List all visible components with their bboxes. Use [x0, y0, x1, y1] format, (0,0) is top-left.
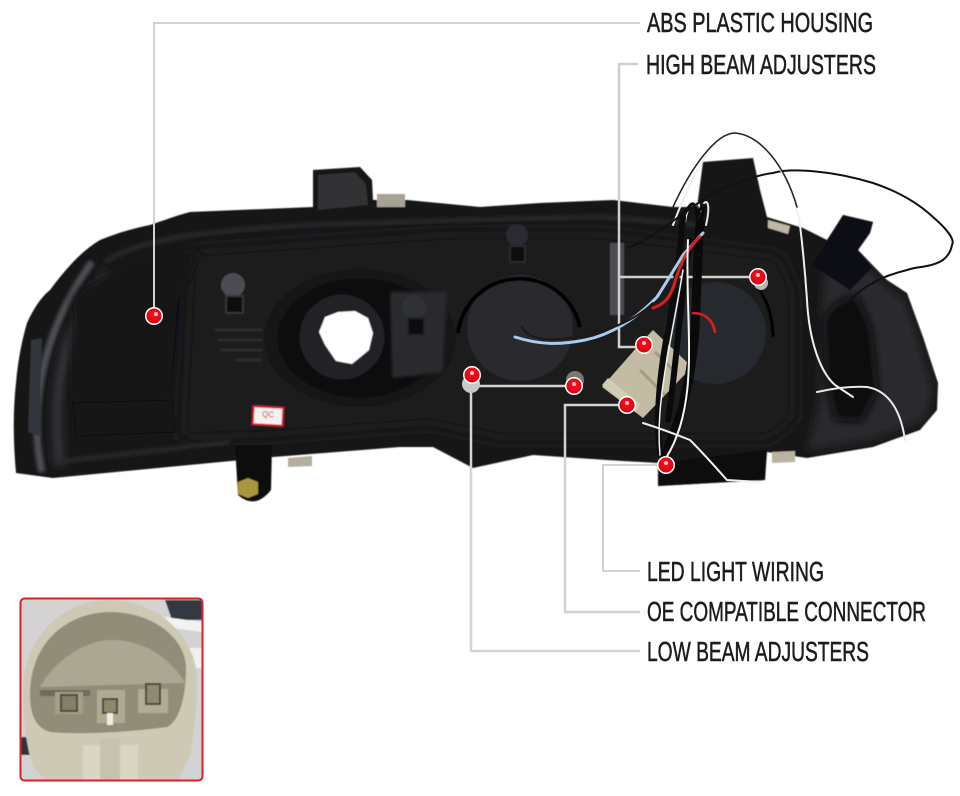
left recessed panel	[72, 252, 200, 402]
label: LED light wiring: LED LIGHT WIRING	[647, 556, 824, 587]
white wire loop	[673, 133, 853, 397]
grey wire beside blue	[522, 303, 653, 340]
lower white wires	[643, 423, 760, 482]
marker: low beam left	[463, 366, 481, 384]
headlight housing	[14, 158, 938, 501]
top left clip	[377, 194, 405, 207]
grey panel beside socket	[390, 292, 447, 378]
QC sticker: QC	[262, 410, 275, 419]
low beam dome	[467, 275, 573, 381]
black loop wire	[707, 170, 953, 300]
harness top tangle	[685, 202, 708, 225]
cavity half dome	[40, 640, 185, 687]
latch	[83, 745, 138, 780]
bottom clips	[288, 456, 312, 467]
leader: OE compatible connector	[565, 405, 640, 612]
label: ABS plastic housing: ABS PLASTIC HOUSING	[647, 7, 873, 38]
central panel	[180, 232, 795, 440]
wiring harness	[515, 133, 953, 482]
adjuster screw: low beam right	[566, 371, 584, 389]
bulb socket recess	[260, 266, 460, 410]
bottom mounting bolt	[235, 445, 272, 501]
low beam arc	[458, 279, 580, 333]
leader: high beam adjusters	[619, 64, 758, 347]
inset red border	[20, 598, 202, 780]
terminal left	[40, 690, 90, 714]
bottom tab	[658, 450, 766, 486]
red wire short	[693, 313, 715, 332]
marker: low beam right	[565, 377, 583, 395]
socket hole	[319, 311, 373, 364]
white bundle wires	[666, 240, 689, 458]
high beam arc	[757, 287, 773, 337]
blue wire	[515, 233, 703, 343]
right lens	[808, 250, 933, 450]
adjuster screw: high beam	[754, 276, 768, 290]
marker: LED wiring	[657, 456, 675, 474]
inner lens band	[57, 272, 108, 465]
top right clip	[768, 220, 790, 234]
top right bracket	[812, 215, 873, 290]
inset background	[21, 599, 202, 780]
top light rim	[105, 217, 700, 262]
socket ring	[298, 293, 386, 381]
outer lens band	[37, 262, 92, 472]
left vent	[28, 338, 42, 436]
high beam bracket reflection	[610, 243, 624, 315]
small grey plug middle	[402, 295, 426, 335]
high beam dome	[664, 282, 766, 384]
black thin loop	[673, 133, 797, 207]
small grey plug top	[506, 224, 528, 262]
QC sticker	[253, 406, 283, 426]
marker: connector bottom	[618, 396, 636, 414]
lower recess	[73, 400, 175, 436]
wire bundle	[658, 217, 683, 452]
embossed markings	[215, 330, 262, 360]
connector cavity	[30, 612, 186, 733]
small grey plug left	[221, 273, 245, 313]
marker: connector top	[635, 336, 653, 354]
top tab inner	[318, 172, 368, 210]
leader: LED light wiring	[603, 465, 665, 571]
right opening	[823, 296, 878, 422]
red wire	[653, 237, 700, 308]
bottom band	[55, 442, 230, 462]
adjuster screw: low beam left	[462, 375, 480, 393]
leader: ABS plastic housing	[154, 23, 640, 316]
marker: housing	[145, 307, 163, 325]
terminal right	[138, 684, 168, 713]
OE connector	[602, 330, 692, 418]
black upper harness	[628, 197, 707, 248]
leader: low beam adjusters	[471, 375, 640, 651]
inset photo: connector close-up	[20, 598, 202, 780]
inner shading clipped to body	[37, 217, 933, 472]
marker: high beam	[749, 268, 767, 286]
leader lines	[154, 23, 758, 651]
connector shell	[23, 600, 197, 780]
housing body	[14, 158, 938, 486]
terminal middle	[97, 690, 125, 725]
